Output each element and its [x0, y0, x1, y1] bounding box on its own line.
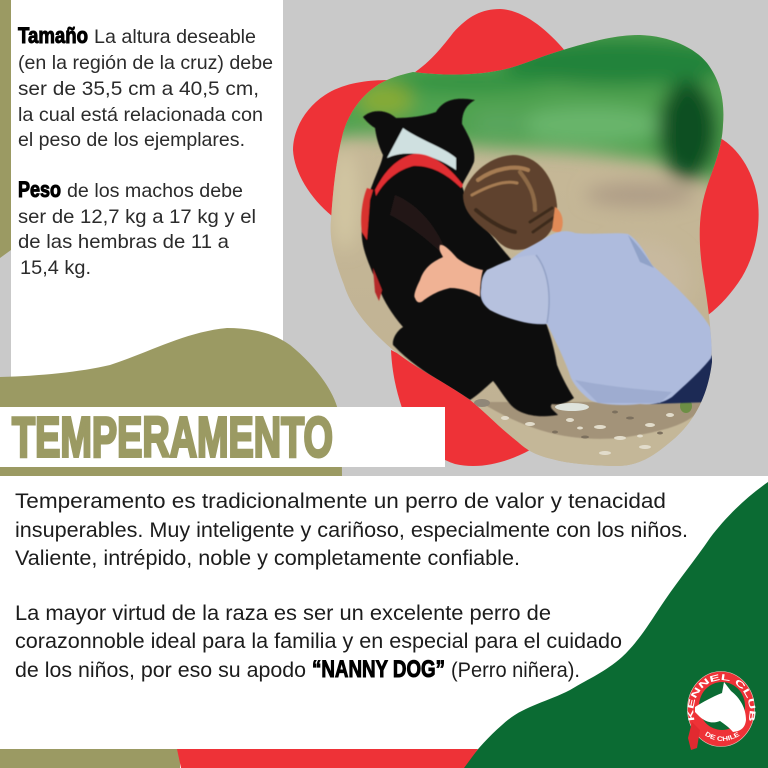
child arm and hand	[414, 245, 483, 302]
child sweater	[480, 231, 712, 405]
white tag	[555, 403, 589, 411]
text block: peso: de los machos debe	[67, 180, 243, 202]
text block: nanny dog: de los niños, por eso su apodo	[15, 658, 306, 682]
text block: peso: ser de 12,7 kg a 17 kg y el	[18, 206, 256, 228]
bottom red bar	[177, 749, 478, 768]
text block: nanny dog	[15, 601, 622, 683]
logo: kennel club de chile	[687, 671, 756, 750]
heading bar	[0, 407, 445, 467]
bottom olive bar	[0, 749, 180, 768]
grey background	[0, 0, 768, 476]
text block: nanny dog: La mayor virtud de la raza es ser un excelente perro de	[15, 601, 551, 625]
text block: peso	[18, 177, 256, 279]
text block: nanny dog: “NANNY DOG”	[312, 656, 445, 683]
photo: dog and child	[330, 35, 724, 466]
heading: temperamento: TEMPERAMENTO	[12, 406, 333, 470]
red blobs behind photo	[293, 9, 759, 466]
text block: tamaño: (en la región de la cruz) debe	[18, 52, 273, 74]
olive side strip	[0, 0, 11, 258]
text block: temperamento description: Valiente, intrépido, noble y completamente confiable.	[15, 546, 520, 570]
white text panel	[11, 0, 283, 385]
text block: tamaño: La altura deseable	[94, 26, 256, 48]
jeans	[650, 354, 714, 404]
icon: dog head	[695, 682, 746, 732]
text block: tamaño: el peso de los ejemplares.	[18, 129, 245, 151]
photo backdrop	[330, 35, 724, 466]
dog body	[361, 99, 574, 416]
logo: kennel club de chile: DE CHILE	[705, 732, 740, 741]
child hair	[463, 155, 563, 250]
text block: peso: Peso	[18, 177, 61, 202]
text block: peso: 15,4 kg.	[20, 257, 91, 279]
text block: nanny dog: corazonnoble ideal para la familia y en especial para el cuidado	[15, 629, 622, 653]
logo: kennel club de chile: KENNEL CLUB	[687, 674, 756, 721]
text block: tamaño: ser de 35,5 cm a 40,5 cm,	[18, 78, 259, 100]
text block: temperamento description: insuperables. Muy inteligente y cariñoso, especialmente con los niños.	[15, 518, 688, 542]
text block: temperamento description: Temperamento es tradicionalmente un perro de valor y tenacidad	[15, 489, 666, 513]
text block: tamaño: Tamaño	[18, 23, 88, 48]
olive wave	[0, 328, 342, 476]
text block: tamaño: la cual está relacionada con	[18, 104, 263, 126]
ground gravel	[474, 399, 701, 466]
text block: temperamento description	[15, 489, 688, 570]
green wave	[463, 482, 768, 768]
text block: tamaño	[18, 23, 273, 151]
text block: peso: de las hembras de 11 a	[18, 231, 229, 253]
text block: nanny dog: (Perro niñera).	[451, 658, 580, 682]
